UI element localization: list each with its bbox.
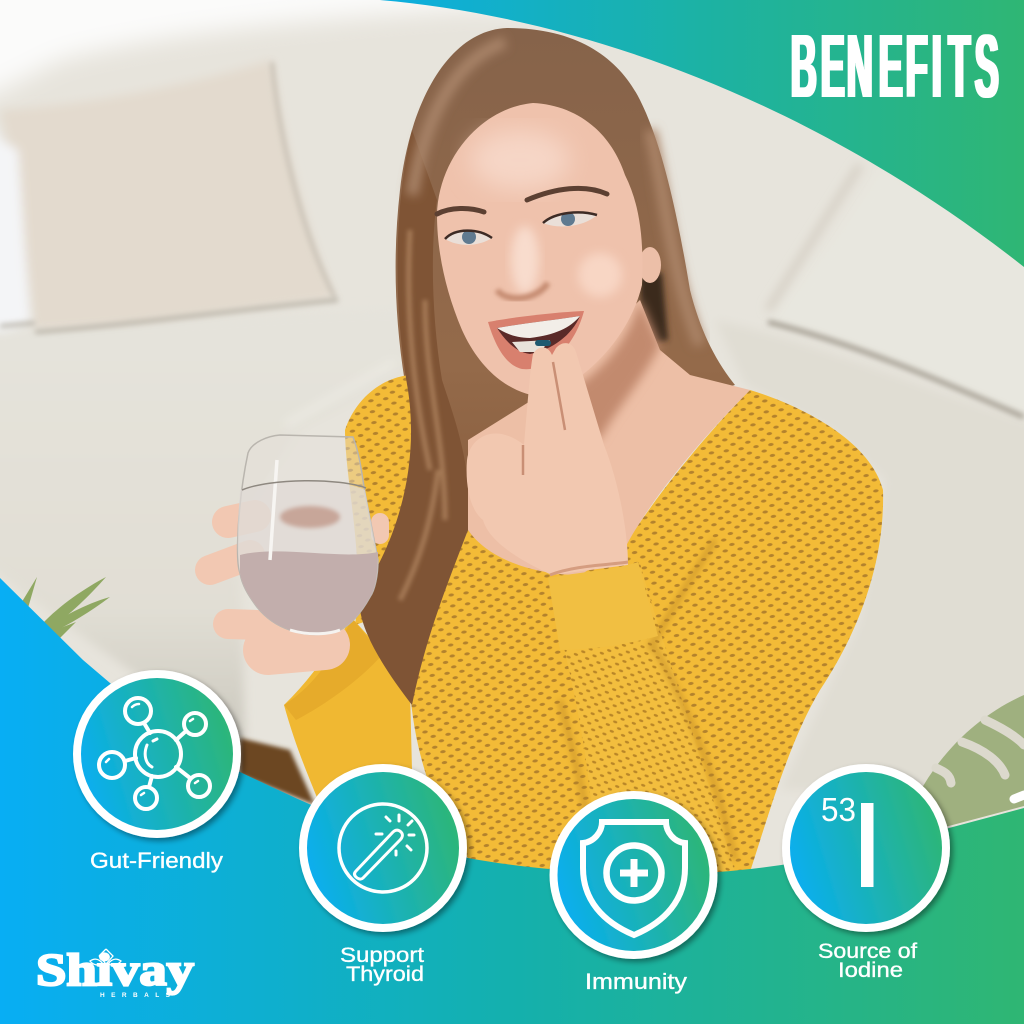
top-right gradient band [380,0,1024,267]
icon: shield with plus [583,822,685,935]
badge: gut-friendly [77,674,237,834]
logo subline: HERBALS [100,992,171,999]
palm fronds decoration [20,577,110,640]
circle badge [786,768,946,928]
icon: magic wand [339,804,427,892]
label: Source of Iodine: Iodine [838,959,903,982]
woman [210,28,883,872]
ear [639,247,661,283]
label: Source of Iodine [818,940,917,982]
water glass [238,435,378,634]
sweater left shoulder [345,375,440,625]
couch seat left [0,308,420,745]
sweater folds [560,540,735,860]
dark hair behind neck [640,272,668,345]
sleeve cuff [284,618,382,720]
eyes [445,212,597,245]
pillow: right cushion [770,165,1024,430]
floor [240,738,315,805]
badge: source of iodine [786,768,946,928]
leaf decoration [918,695,1024,827]
badge: immunity [554,795,714,955]
label: Immunity: Immunity [585,969,687,994]
nose [497,283,548,298]
label: Gut-Friendly: Gut-Friendly [90,848,223,873]
label: Support Thyroid: Support [340,944,424,967]
sweater left sleeve [284,618,412,800]
hair [396,28,735,540]
icon: molecule [99,698,210,809]
pillow: far-left white cushion [0,100,30,340]
left hand [210,516,380,650]
pinching hand [467,343,628,575]
label: Support Thyroid: Thyroid [346,963,424,986]
logo: Shivay Herbals [36,944,194,999]
icon: iodine element symbol [821,791,874,887]
neck and chest [468,300,750,575]
circle badge [554,795,714,955]
neck shadow [548,300,660,440]
sweater right sleeve [550,563,735,872]
bottom gradient panel [0,578,1024,1024]
face [437,103,642,397]
label: Support Thyroid [340,944,424,986]
sweater torso [410,390,883,872]
badge: support thyroid [303,768,463,928]
circle badge [77,674,237,834]
hair lock over sweater [359,130,469,705]
eyebrows [437,188,607,214]
right sleeve cuff [548,562,658,650]
pillow: left cushion [0,60,335,332]
wall [0,0,1024,120]
icon: iodine element symbol: 53 [821,791,856,828]
couch seat right [715,320,1024,790]
circle badge [303,768,463,928]
couch seams [272,62,335,298]
pill [535,340,551,346]
logo leaf mark [90,949,121,965]
mouth [488,311,584,369]
logo wordmark: Shivay [36,944,194,995]
label: Source of Iodine: Source of [818,940,917,963]
title: BENEFITS: BENEFITS [791,16,999,117]
